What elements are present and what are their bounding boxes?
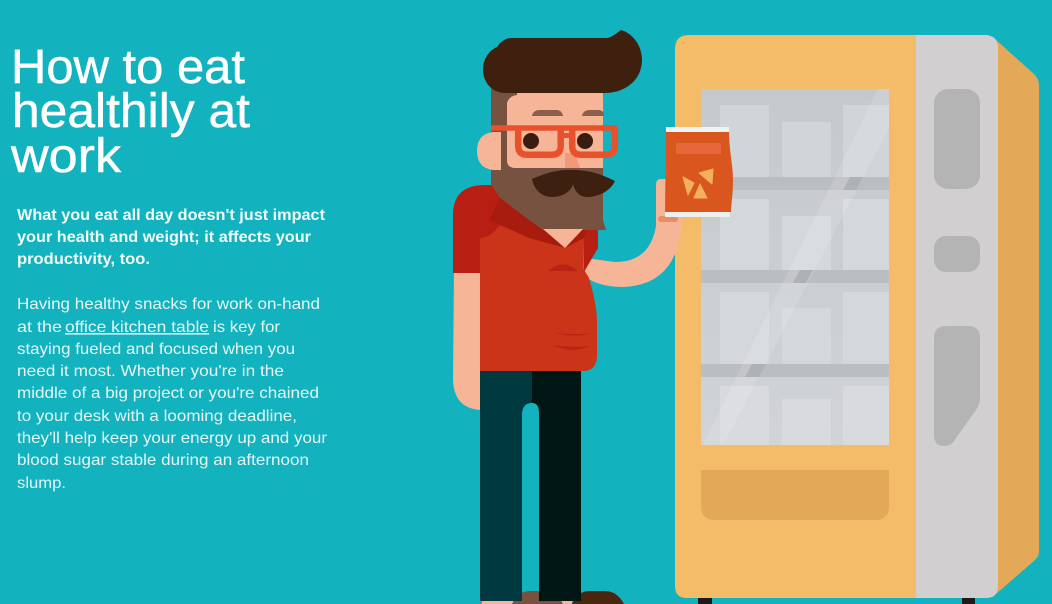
machine side panel: [996, 40, 1039, 594]
keypad button: [934, 236, 980, 272]
snack boxes: [720, 105, 889, 177]
sleeve and shoulder: [453, 185, 530, 273]
bag top seal: [666, 127, 729, 132]
body text block: at the: [17, 319, 62, 336]
title: work: [10, 130, 122, 183]
raised arm: [585, 179, 682, 287]
body text block: staying fueled and focused when you: [17, 341, 295, 358]
character: [453, 30, 682, 604]
eyes: [523, 133, 593, 149]
body text block: [17, 296, 328, 492]
intro text block: What you eat all day doesn't just impact: [17, 207, 326, 224]
collection tray: [701, 470, 889, 520]
body text block: office kitchen table: [65, 319, 209, 336]
intro text block: [17, 207, 326, 268]
machine front panel: [675, 35, 916, 598]
glass reflection: [703, 89, 889, 445]
coin slot panel: [934, 326, 980, 446]
body text block: blood sugar stable during an afternoon: [17, 452, 309, 469]
shirt body: [480, 225, 597, 371]
glasses: [491, 128, 618, 155]
collar: [489, 198, 587, 248]
shelves: [701, 177, 889, 377]
body text block: Having healthy snacks for work on-hand: [17, 296, 320, 313]
left arm: [453, 270, 480, 410]
trousers: [480, 370, 581, 601]
body text block: they'll help keep your energy up and your: [17, 430, 328, 447]
title: How to eat: [11, 41, 245, 94]
body text block: need it most. Whether you're in the: [17, 363, 284, 380]
eyebrows: [532, 110, 604, 116]
hair: [483, 30, 642, 93]
snack bag: [665, 127, 733, 217]
body text block: to your desk with a looming deadline,: [17, 408, 297, 425]
body text block: slump.: [17, 475, 66, 492]
nose: [565, 153, 580, 168]
chip icon: [683, 169, 713, 198]
machine control panel: [916, 35, 998, 598]
shoes: [482, 591, 624, 604]
intro text block: productivity, too.: [17, 251, 150, 268]
ear: [477, 132, 501, 170]
moustache: [532, 170, 615, 197]
machine legs: [698, 596, 975, 604]
bag label: [676, 143, 721, 154]
face: [507, 93, 603, 168]
neck: [543, 229, 583, 248]
reflection shelf crossings: [745, 177, 863, 377]
title: healthily at: [12, 85, 250, 138]
intro text block: your health and weight; it affects your: [17, 229, 311, 246]
button display: [934, 89, 980, 189]
bag bottom seal: [665, 212, 730, 217]
beard and sideburn: [491, 85, 606, 230]
body text block: middle of a big project or you're chained: [17, 385, 319, 402]
body text block: is key for: [213, 319, 281, 336]
vending window: [701, 89, 889, 445]
hand shadow: [658, 216, 678, 222]
shirt creases: [548, 264, 592, 350]
title: [10, 41, 250, 183]
vending machine: [675, 35, 1039, 604]
